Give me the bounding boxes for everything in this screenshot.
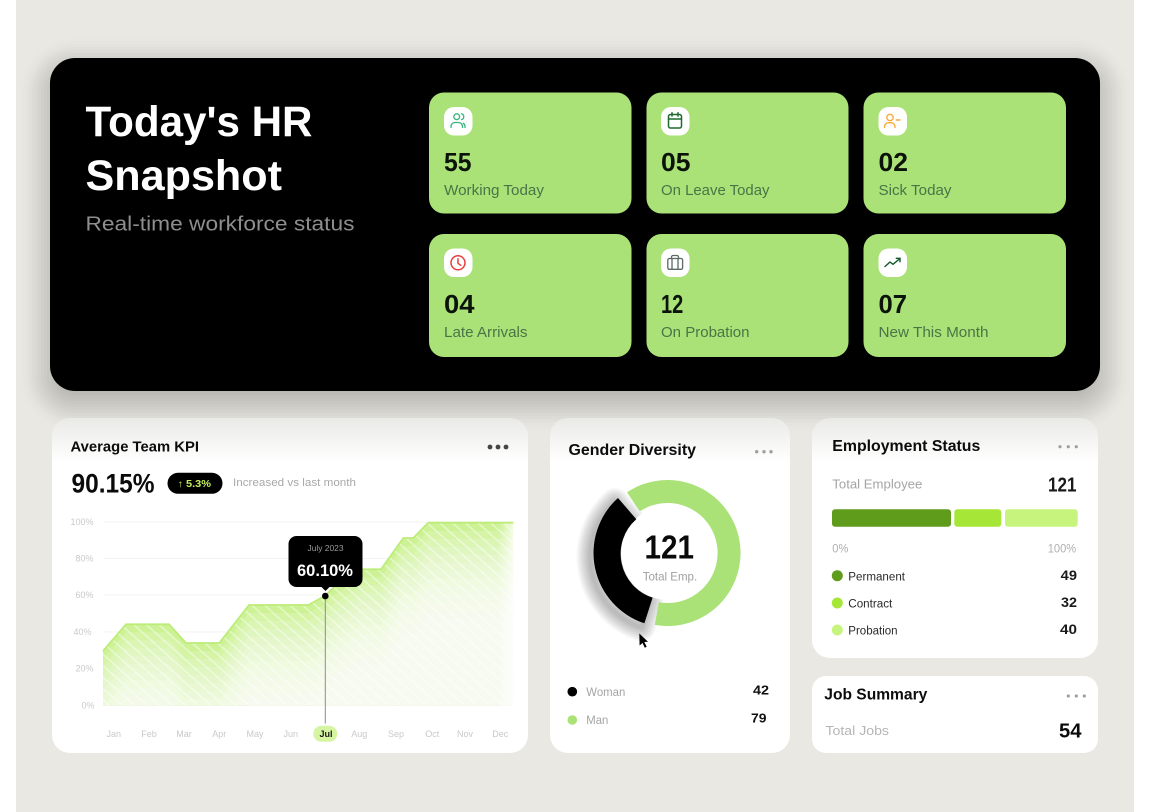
panel: job summary (812, 676, 1098, 753)
panel: average team KPI (52, 418, 528, 753)
icon: clock (451, 256, 465, 270)
stat card: sick today (864, 92, 1066, 214)
legend: contract: Contract (848, 599, 893, 611)
stat card: working today (429, 92, 632, 214)
area series (102, 522, 514, 706)
tooltip: 60.10% (297, 561, 353, 580)
bar scale: 0% (832, 541, 849, 555)
icon: calendar (668, 113, 682, 128)
stat card: on probation: 12 (661, 291, 683, 319)
legend: contract (832, 595, 1077, 611)
heading: job summary: Job Summary (824, 686, 928, 703)
x axis labels: Jan (106, 729, 121, 739)
legend: permanent: 49 (1061, 568, 1077, 583)
stat card: working today: 55 (444, 149, 472, 177)
legend: probation (832, 622, 1077, 638)
stat card: sick today: 02 (878, 149, 908, 177)
stat card: on leave today: 05 (661, 149, 690, 177)
x axis labels: May (246, 729, 264, 739)
tooltip: July 2023 (308, 543, 344, 553)
heading: gender diversity: Gender Diversity (568, 442, 696, 459)
stat card: late arrivals: 04 (444, 291, 475, 319)
donut total: 121 (644, 528, 694, 566)
stat card: new this month: New This Month (878, 325, 988, 341)
stat card: working today: Working Today (444, 183, 545, 199)
legend: probation: 40 (1060, 622, 1077, 637)
title: Snapshot (86, 152, 282, 200)
selected month highlight (313, 726, 337, 742)
tooltip (288, 536, 362, 599)
donut chart (591, 480, 741, 627)
stat card: new this month: 07 (878, 291, 907, 319)
x axis labels: Jul (319, 729, 333, 739)
legend: woman: Woman (586, 687, 625, 699)
icon: menu dots (1058, 445, 1078, 448)
y axis labels (70, 517, 94, 710)
segment: man (627, 480, 741, 626)
stat card: new this month (864, 234, 1066, 357)
stat card: late arrivals: Late Arrivals (444, 325, 528, 341)
panel: hero snapshot (50, 58, 1100, 391)
title: Today's HR (86, 98, 312, 146)
icon: trending up (885, 258, 900, 266)
stat card: on leave today (646, 92, 848, 214)
legend: permanent: Permanent (848, 572, 906, 584)
x axis labels: Sep (388, 729, 404, 739)
subtitle: Real-time workforce status (86, 214, 354, 236)
x axis labels (106, 729, 509, 739)
marker line (324, 596, 326, 724)
icon: briefcase (668, 256, 683, 269)
total jobs label: Total Jobs (826, 723, 890, 738)
total employee row: Total Employee (832, 476, 922, 491)
icon: cursor (639, 634, 648, 648)
KPI note: Increased vs last month (233, 477, 356, 489)
badge: increase (168, 473, 222, 494)
line chart (71, 518, 514, 742)
x axis labels: Mar (176, 729, 192, 739)
legend: probation: Probation (848, 626, 898, 638)
panel: gender diversity (550, 418, 790, 753)
legend: permanent (832, 568, 1077, 584)
total jobs value: 54 (1059, 720, 1082, 743)
icon: menu dots (488, 445, 508, 449)
donut caption: Total Emp. (643, 570, 697, 584)
badge: increase: ↑ 5.3% (178, 479, 211, 490)
bar scale: 100% (1048, 541, 1076, 555)
stat card: on probation (646, 234, 848, 357)
stat card: on leave today: On Leave Today (661, 183, 770, 199)
heading: average team KPI: Average Team KPI (70, 440, 199, 456)
x axis labels: Aug (351, 729, 367, 739)
x axis labels: Nov (457, 729, 473, 739)
x axis labels: Apr (212, 729, 226, 739)
y axis labels: 60% (75, 590, 94, 600)
stat card: sick today: Sick Today (878, 183, 952, 199)
legend: woman (568, 682, 769, 699)
stat card: late arrivals (429, 234, 632, 357)
icon: user minus (884, 114, 900, 128)
y axis labels: 40% (73, 627, 92, 637)
panel: employment status (812, 418, 1098, 658)
x axis labels: Dec (492, 729, 509, 739)
stat card: on probation: On Probation (661, 325, 750, 341)
total employee row: 121 (1048, 475, 1076, 497)
y axis labels: 100% (70, 517, 94, 527)
x axis labels: Feb (141, 729, 157, 739)
icon: menu dots (755, 450, 773, 453)
legend: man: 79 (751, 711, 766, 726)
stacked bar (832, 509, 1078, 527)
legend: man: Man (586, 715, 608, 727)
heading: employment status: Employment Status (832, 438, 980, 455)
KPI value: 90.15% (72, 468, 154, 498)
legend: contract: 32 (1061, 595, 1077, 610)
icon: menu dots (1067, 694, 1086, 698)
icon: people (451, 114, 465, 128)
x axis labels: Oct (425, 729, 440, 739)
segment: woman (594, 498, 653, 623)
legend: man (568, 711, 766, 727)
x axis labels: Jun (283, 729, 298, 739)
title (86, 98, 312, 200)
y axis labels: 0% (81, 700, 94, 710)
bar scale (832, 541, 1076, 555)
y axis labels: 20% (75, 664, 94, 674)
y axis labels: 80% (75, 554, 94, 564)
legend: woman: 42 (753, 682, 769, 697)
total employee row (832, 475, 1076, 497)
